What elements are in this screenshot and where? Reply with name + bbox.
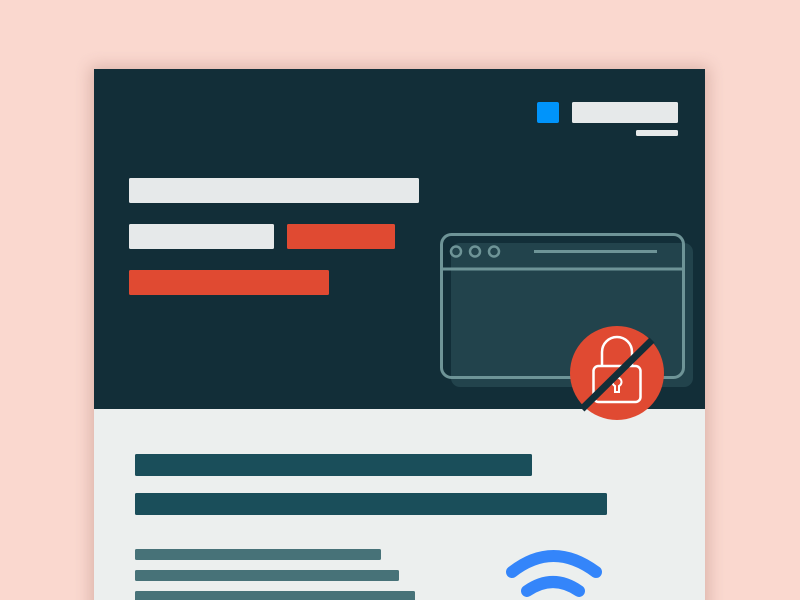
browser window icon [442,234,693,387]
heading bars [135,454,607,515]
headline bars [129,178,419,295]
panel: body light [94,409,705,600]
icon: broken lock badge [570,326,664,420]
text lines [135,549,415,600]
icon: wifi [512,556,596,591]
logo [537,102,678,136]
panel: header dark [94,69,705,409]
